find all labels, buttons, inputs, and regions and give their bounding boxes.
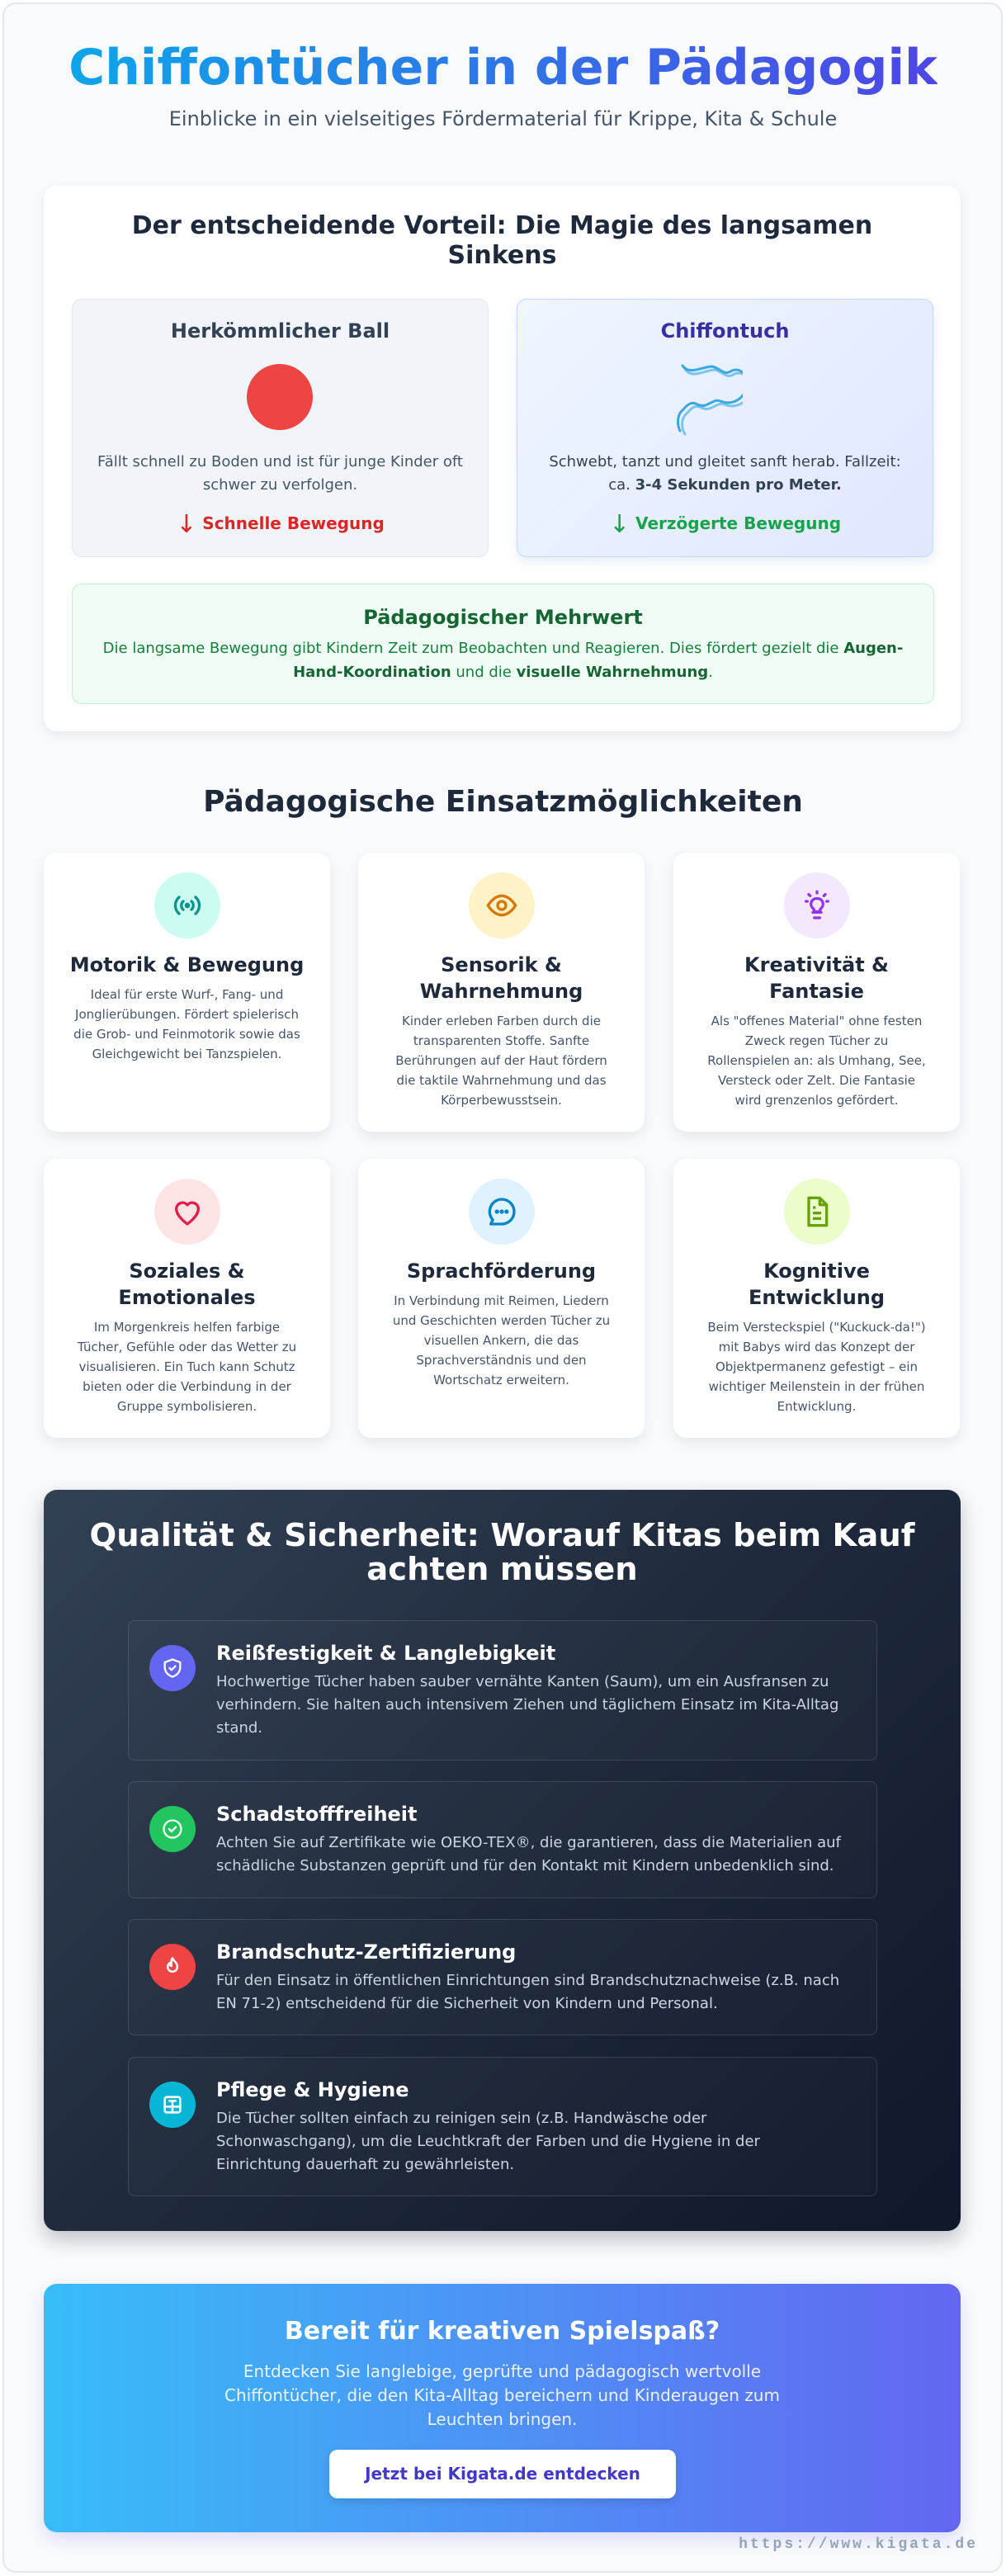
card: sensorik: die taktile Wahrnehmung und das — [396, 1073, 607, 1088]
card: kreativitaet: Als "offenes Material" ohne festen — [711, 1014, 922, 1028]
card: motorik: Motorik & Bewegung — [70, 953, 304, 976]
card: sozial: Emotionales — [118, 1286, 256, 1309]
label: fast movement: ↓ Schnelle Bewegung — [176, 510, 385, 539]
text: cta: Entdecken Sie langlebige, geprüfte und pädagogisch wertvolle — [243, 2361, 761, 2381]
card: kognitiv: wichtiger Meilenstein in der frühen — [709, 1379, 924, 1394]
card: kognitiv: mit Babys wird das Konzept der — [719, 1340, 914, 1354]
text: value — [103, 640, 903, 681]
heading: cta: Bereit für kreativen Spielspaß? — [285, 2317, 720, 2346]
heading: quality — [89, 1517, 915, 1588]
item: tear resistance: Reißfestigkeit & Langlebigkeit — [216, 1642, 555, 1665]
item: pollutant free: Schadstofffreiheit — [216, 1803, 418, 1826]
subtitle: Einblicke in ein vielseitiges Fördermaterial für Krippe, Kita & Schule — [169, 107, 837, 130]
button: cta: Jetzt bei Kigata.de entdecken — [365, 2464, 640, 2484]
item: pollutant free — [128, 1781, 877, 1898]
card: kognitiv: Beim Versteckspiel ("Kuckuck-da!") — [707, 1320, 926, 1335]
item: care & hygiene: Pflege & Hygiene — [216, 2078, 409, 2101]
card: kognitiv — [673, 1159, 960, 1438]
text: value: Die langsame Bewegung gibt Kindern Zeit zum Beobachten und Reagieren. Dies fördert gezielt die Augen- — [103, 640, 903, 657]
card: kognitiv: Entwicklung. — [777, 1399, 856, 1414]
heading: uses: Pädagogische Einsatzmöglichkeiten — [203, 785, 803, 819]
item: fire protection: Für den Einsatz in öffentlichen Einrichtungen sind Brandschutznachweise (z.B. nach — [216, 1972, 839, 1989]
card: sprache: Sprachförderung — [407, 1260, 596, 1283]
item: pollutant free: Achten Sie auf Zertifikate wie OEKO-TEX®, die garantieren, dass die Materialien auf — [216, 1834, 841, 1851]
box: chiffon — [517, 299, 933, 557]
icon: heart — [153, 1179, 220, 1245]
icon: bulb — [784, 872, 850, 938]
item: tear resistance — [128, 1620, 877, 1761]
text: ball description — [97, 453, 463, 494]
panel: call to action — [44, 2284, 961, 2532]
card: motorik: Gleichgewicht bei Tanzspielen. — [92, 1047, 281, 1061]
panel: quality & safety — [44, 1490, 961, 2231]
text: cta: Chiffontücher, die den Kita-Alltag bereichern und Kinderaugen zum — [224, 2385, 780, 2405]
heading: value: Pädagogischer Mehrwert — [363, 606, 643, 629]
title: Chiffontücher in der Pädagogik — [68, 39, 938, 97]
icon: flame — [149, 1944, 196, 1990]
card: sozial: Im Morgenkreis helfen farbige — [94, 1320, 280, 1335]
item: tear resistance: verhindern. Sie halten auch intensivem Ziehen und täglichem Einsatz im Kita-Alltag — [216, 1696, 838, 1713]
item: fire protection: Brandschutz-Zertifizierung — [216, 1940, 516, 1964]
card: kreativitaet: Rollenspielen an: als Umhang, See, — [707, 1053, 926, 1068]
card: kreativitaet: Versteck oder Zelt. Die Fantasie — [718, 1073, 915, 1088]
card: motorik: Ideal für erste Wurf-, Fang- und — [91, 987, 283, 1002]
card: kreativitaet: Kreativität & — [744, 953, 889, 976]
card: sensorik: Kinder erleben Farben durch die — [402, 1014, 601, 1028]
heading: comparison — [132, 211, 872, 270]
footer url: https://www.kigata.de — [739, 2536, 978, 2553]
card: sozial: visualisieren. Ein Tuch kann Schutz — [79, 1359, 295, 1374]
card: kreativitaet: Zweck regen Tücher zu — [745, 1033, 888, 1048]
card: motorik: Jonglierübungen. Fördert spielerisch — [75, 1007, 299, 1022]
card: sozial: Soziales & — [129, 1260, 245, 1283]
card: sensorik — [358, 853, 645, 1132]
text: ball description: schwer zu verfolgen. — [203, 476, 357, 494]
card: sozial: bieten oder die Verbindung in der — [83, 1379, 291, 1394]
text: ball description: Fällt schnell zu Boden und ist für junge Kinder oft — [97, 453, 463, 470]
item: tear resistance: stand. — [216, 1719, 262, 1737]
text: cta: Leuchten bringen. — [427, 2409, 577, 2429]
card: motorik — [44, 853, 330, 1132]
item: pollutant free: schädliche Substanzen geprüft und für den Kontakt mit Kindern unbedenklich sind. — [216, 1857, 834, 1874]
heading: quality: Qualität & Sicherheit: Worauf Kitas beim Kauf — [89, 1517, 915, 1554]
item: care & hygiene: Die Tücher sollten einfach zu reinigen sein (z.B. Handwäsche oder — [216, 2110, 706, 2127]
card: sensorik: Berührungen auf der Haut fördern — [395, 1053, 607, 1068]
icon: motion — [153, 872, 220, 938]
item: care & hygiene: Einrichtung dauerhaft zu gewährleisten. — [216, 2156, 514, 2173]
card: sprache: und Geschichten werden Tücher zu — [393, 1313, 610, 1328]
item: tear resistance: Hochwertige Tücher haben sauber vernähte Kanten (Saum), um ein Ausfransen zu — [216, 1673, 829, 1690]
heading: comparison: Sinkens — [448, 241, 556, 270]
text: chiffon description: Schwebt, tanzt und gleitet sanft herab. Fallzeit: — [549, 453, 901, 470]
callout: pedagogical value — [72, 584, 934, 704]
card: kreativitaet: wird grenzenlos gefördert. — [735, 1093, 898, 1108]
card: sprache: Sprachverständnis und den — [416, 1353, 587, 1368]
card: sensorik: Wahrnehmung — [420, 980, 583, 1003]
icon: check — [149, 1806, 196, 1852]
card: sprache: In Verbindung mit Reimen, Liedern — [394, 1293, 609, 1308]
item: fire protection — [128, 1919, 877, 2035]
card: sprache: Wortschatz erweitern. — [433, 1373, 569, 1387]
card: kognitiv: Kognitive — [763, 1260, 870, 1283]
icon: document — [784, 1179, 850, 1245]
icon: red ball — [247, 364, 313, 430]
heading: ball: Herkömmlicher Ball — [171, 319, 390, 343]
heading: quality: achten müssen — [366, 1551, 638, 1588]
icon: washing — [149, 2082, 196, 2128]
card: sozial: Gruppe symbolisieren. — [117, 1399, 257, 1414]
box: ball — [72, 299, 489, 557]
card: sensorik: Körperbewusstsein. — [441, 1093, 562, 1108]
text: value: Hand-Koordination und die visuelle Wahrnehmung. — [293, 664, 713, 681]
label: delayed movement: ↓ Verzögerte Bewegung — [609, 510, 841, 539]
item: fire protection: EN 71-2) entscheidend für die Sicherheit von Kindern und Personal. — [216, 1995, 718, 2012]
item: care & hygiene — [128, 2057, 877, 2196]
icon: floating cloth — [677, 364, 743, 436]
heading: comparison: Der entscheidende Vorteil: Die Magie des langsamen — [132, 211, 872, 240]
card: sozial: Tücher, Gefühle oder das Wetter zu — [78, 1340, 296, 1354]
card: kreativitaet — [673, 853, 960, 1132]
item: care & hygiene: Schonwaschgang), um die Leuchtkraft der Farben und die Hygiene in der — [216, 2133, 760, 2150]
card: sozial — [44, 1159, 330, 1438]
card: motorik: die Grob- und Feinmotorik sowie das — [73, 1027, 300, 1042]
card: sensorik: Sensorik & — [441, 953, 562, 976]
card: sprache: visuellen Ankern, die das — [424, 1333, 579, 1348]
panel: slow sinking comparison — [44, 186, 961, 731]
icon: shield — [149, 1645, 196, 1691]
card: kognitiv: Entwicklung — [749, 1286, 885, 1309]
text: chiffon description: ca. 3-4 Sekunden pro Meter. — [608, 476, 842, 494]
icon: eye — [469, 872, 535, 938]
text: cta — [224, 2361, 780, 2429]
card: kognitiv: Objektpermanenz gefestigt – ein — [716, 1359, 918, 1374]
icon: speech bubble — [469, 1179, 535, 1245]
card: sensorik: transparenten Stoffe. Sanfte — [413, 1033, 589, 1048]
card: kreativitaet: Fantasie — [769, 980, 864, 1003]
text: chiffon description — [549, 453, 901, 494]
card: sprache — [358, 1159, 645, 1438]
heading: chiffon: Chiffontuch — [661, 319, 789, 343]
button: cta — [329, 2450, 676, 2498]
